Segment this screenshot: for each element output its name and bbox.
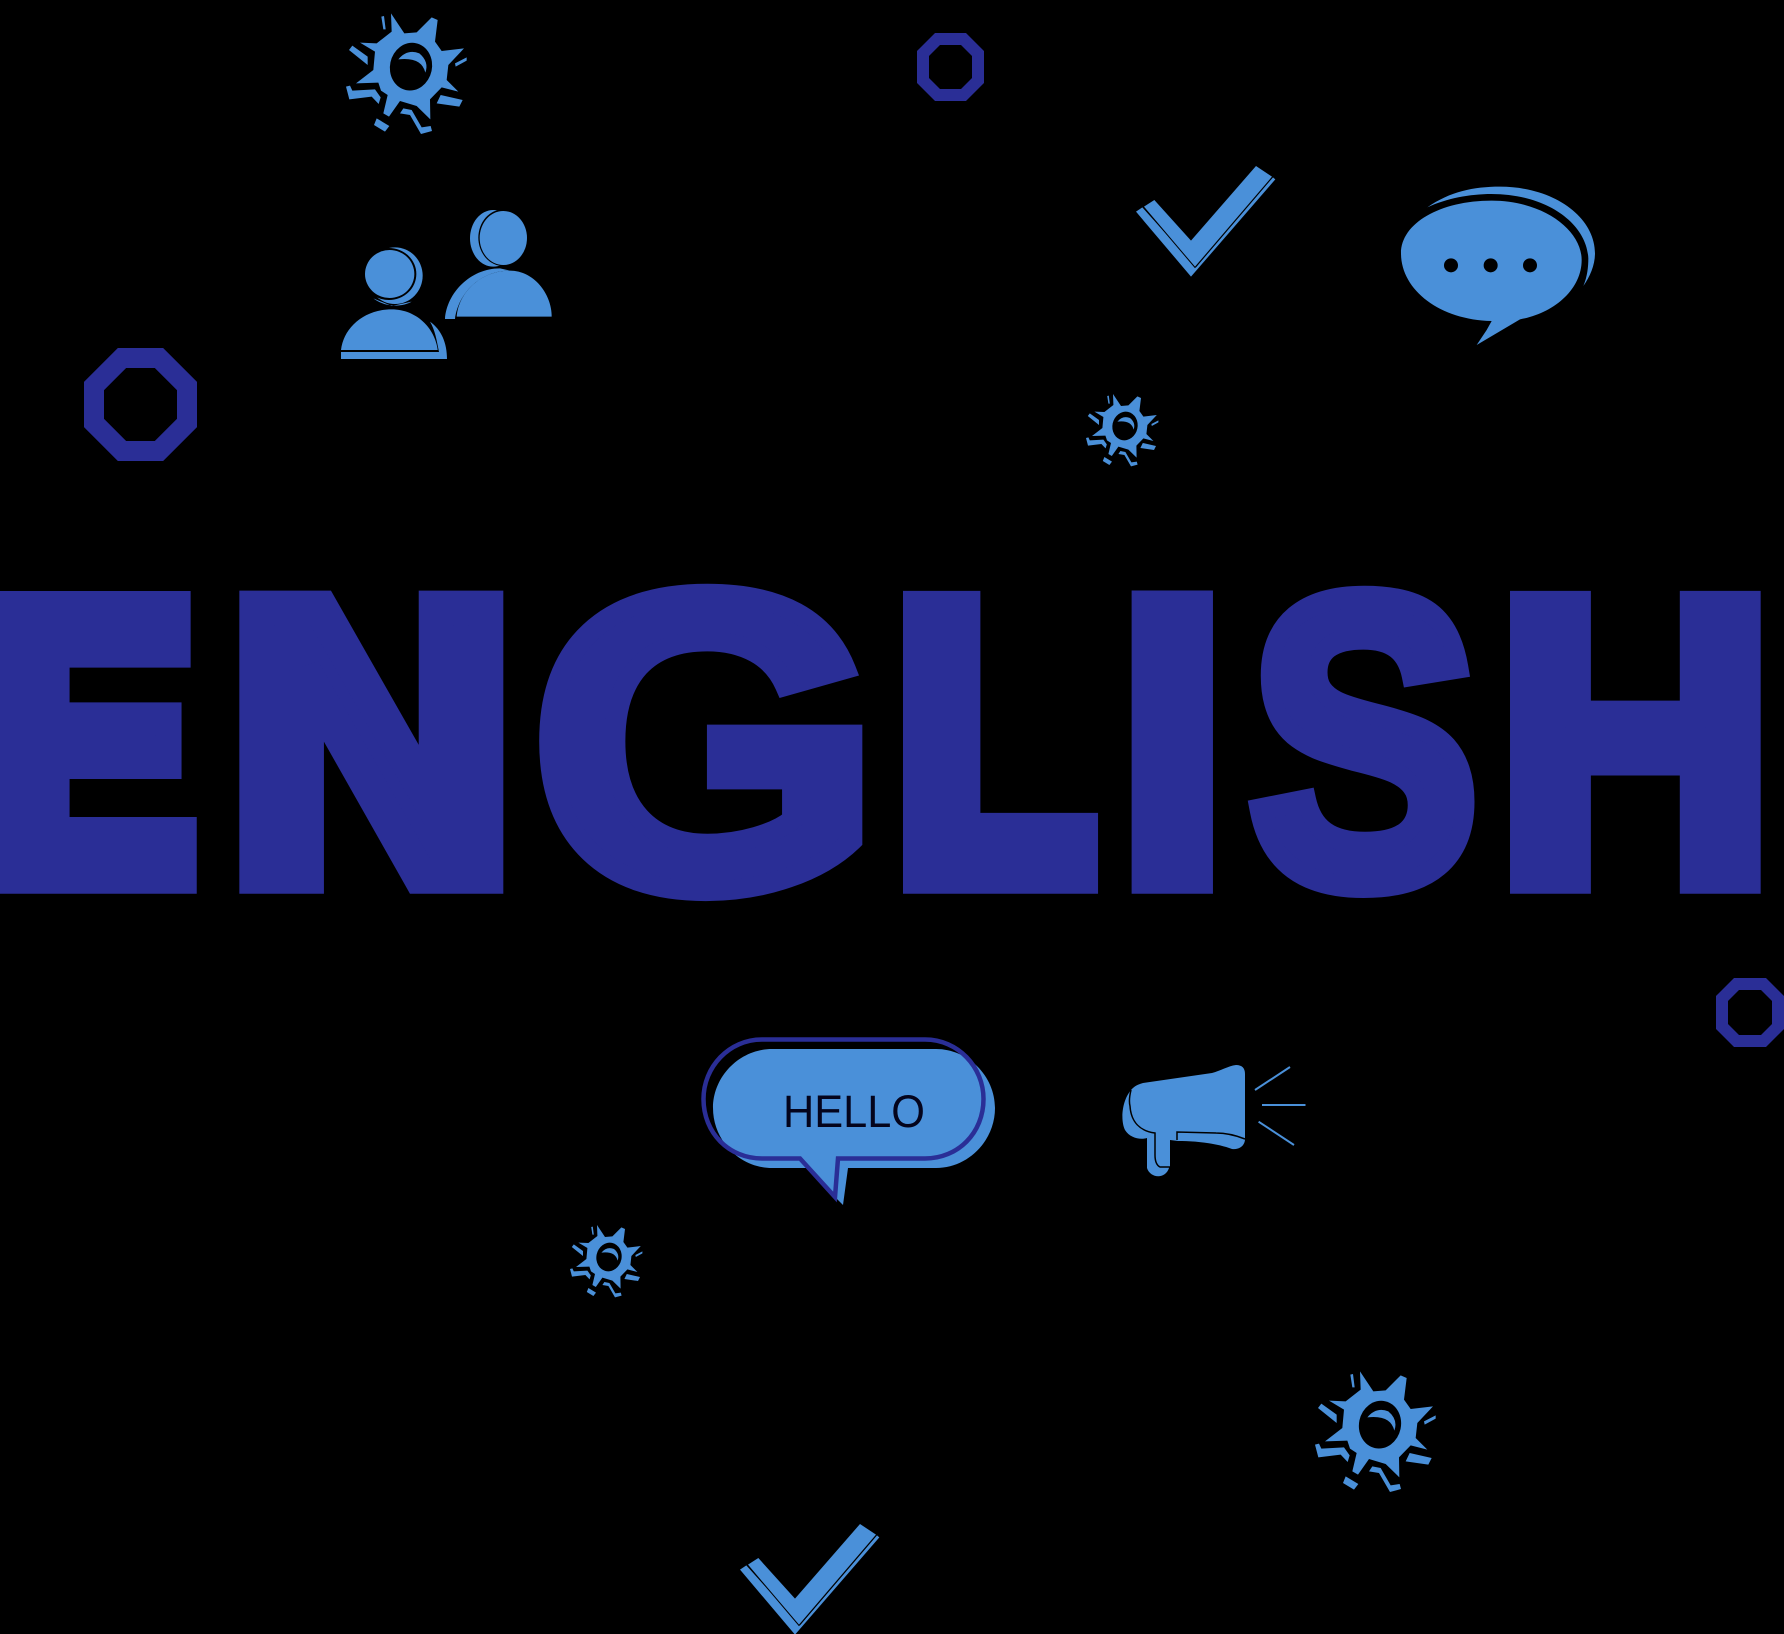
title: ENGLISH: I (1120, 518, 1225, 965)
title: ENGLISH: L (897, 526, 1092, 956)
icon: megaphone (1122, 1065, 1306, 1176)
icon: check top (1136, 166, 1275, 277)
icon: octagon left (94, 358, 187, 451)
title: ENGLISH: N (231, 523, 512, 959)
callout: HELLO speech bubble (704, 1040, 995, 1205)
icon: gear top (346, 13, 467, 134)
icon: gear small upper (1086, 394, 1158, 466)
icon: people (341, 209, 552, 359)
icon: chat bubble with dots (1401, 187, 1595, 345)
callout: HELLO speech bubble: HELLO (783, 1086, 925, 1137)
icon: octagon right (1722, 984, 1778, 1041)
icon: gear small lower (570, 1225, 642, 1297)
title: ENGLISH: S (1249, 513, 1479, 971)
title: ENGLISH: G (532, 507, 879, 976)
title: ENGLISH: H (1497, 518, 1774, 966)
icon: check bottom (740, 1524, 879, 1634)
title: ENGLISH (0, 507, 1774, 976)
icon: octagon top (923, 39, 978, 95)
icon: gear bottom right (1315, 1371, 1436, 1492)
